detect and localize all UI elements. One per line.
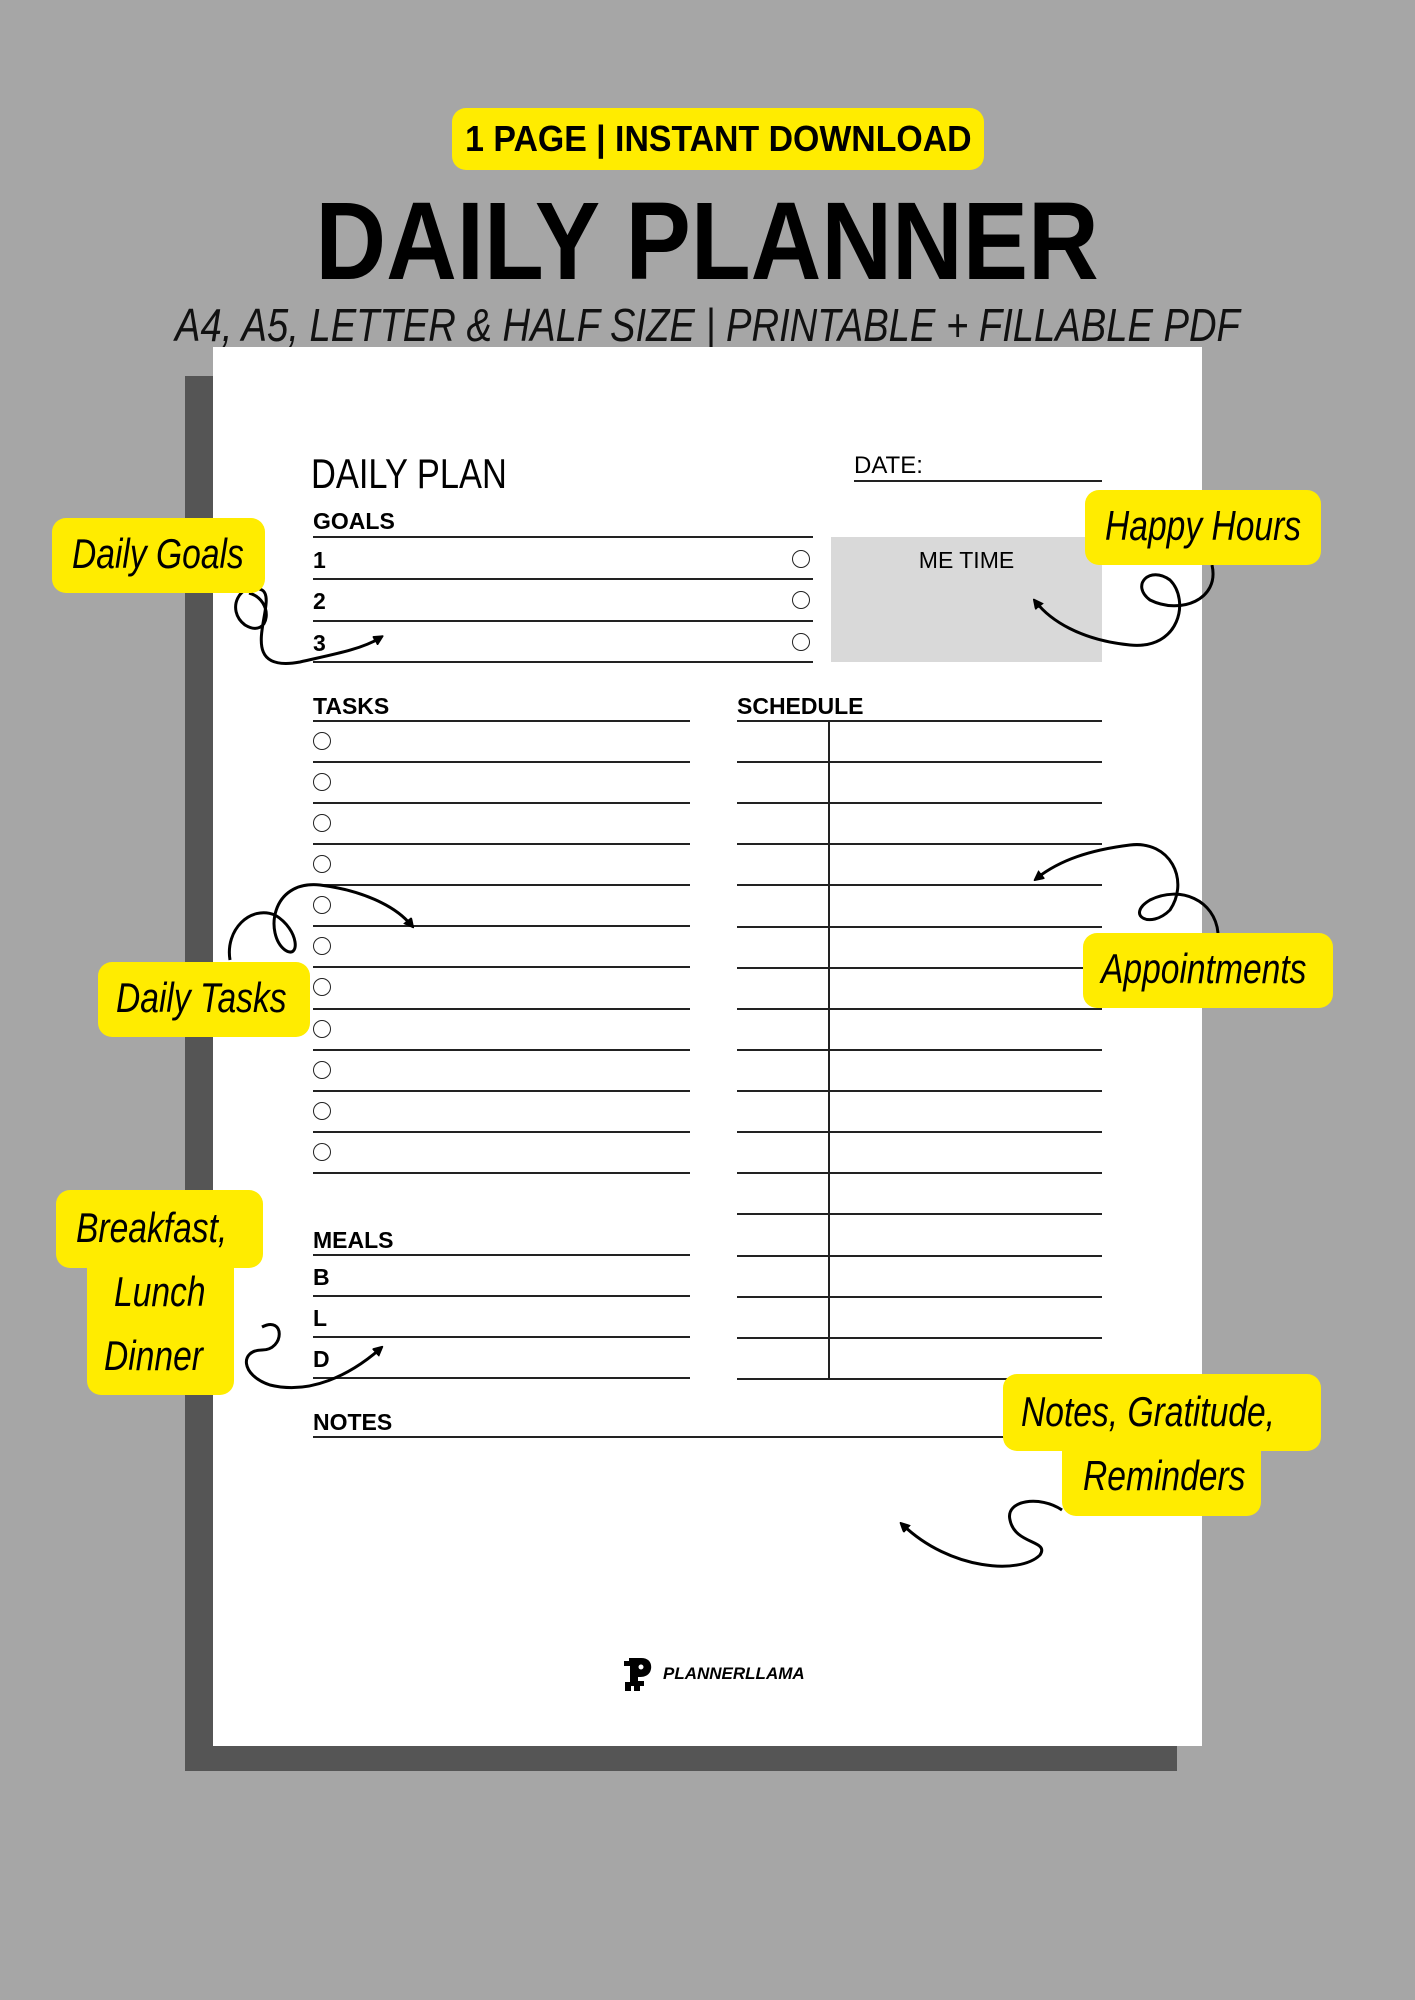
callout: breakfast lunch dinner: Dinner (104, 1332, 203, 1379)
panel: goals: GOALS (313, 508, 395, 534)
panel: schedule: SCHEDULE (737, 693, 864, 719)
arrow: meals (246, 1324, 380, 1388)
badge: 1 page instant download: 1 PAGE | INSTANT DOWNLOAD (465, 118, 971, 159)
callout: appointments (1083, 933, 1333, 1008)
panel: meals: B (313, 1264, 330, 1290)
logo: plannerllama: PLANNERLLAMA (663, 1664, 805, 1683)
panel: goals: 3 (313, 630, 326, 656)
title: DAILY PLANNER (316, 180, 1099, 303)
panel: tasks (313, 693, 690, 1174)
arrow: appointments (1037, 845, 1218, 933)
date field (854, 452, 1102, 482)
panel: goals: 1 (313, 547, 326, 573)
panel: me time: ME TIME (919, 547, 1014, 573)
paper: planner page (213, 347, 1202, 1746)
paper shadow (185, 376, 1177, 1771)
callout: breakfast lunch dinner (56, 1190, 263, 1395)
panel: meals: D (313, 1346, 330, 1372)
panel: notes: NOTES (313, 1409, 392, 1435)
callout: notes gratitude reminders: Reminders (1083, 1452, 1245, 1499)
panel: meals: MEALS (313, 1227, 394, 1253)
panel: goals (313, 508, 813, 663)
heading: daily plan: DAILY PLAN (311, 450, 507, 497)
callout: happy hours (1085, 490, 1321, 565)
arrow: happy hours (1036, 565, 1213, 645)
logo: plannerllama (624, 1658, 805, 1691)
panel: tasks: TASKS (313, 693, 389, 719)
arrow: daily goals (236, 588, 380, 664)
panel: me time (831, 537, 1102, 662)
callout: breakfast lunch dinner: Lunch (114, 1268, 206, 1315)
panel: meals: L (313, 1305, 327, 1331)
callout: happy hours: Happy Hours (1105, 502, 1301, 549)
callout: notes gratitude reminders: Notes, Gratitude, (1021, 1388, 1275, 1435)
callout: daily goals: Daily Goals (72, 530, 244, 577)
panel: meals (313, 1227, 690, 1379)
arrow: notes (903, 1501, 1062, 1566)
callout: appointments: Appointments (1101, 945, 1306, 992)
subtitle: A4, A5, LETTER & HALF SIZE | PRINTABLE + FILLABLE PDF (175, 299, 1240, 351)
date field: DATE: (854, 452, 923, 479)
badge: 1 page instant download (452, 108, 984, 170)
callout: breakfast lunch dinner: Breakfast, (76, 1204, 227, 1251)
arrow: daily tasks (229, 885, 411, 960)
callout: daily tasks: Daily Tasks (116, 974, 287, 1021)
callout: notes gratitude reminders (1003, 1374, 1321, 1516)
callout: daily tasks (98, 962, 310, 1037)
panel: goals: 2 (313, 588, 326, 614)
callout: daily goals (52, 518, 265, 593)
